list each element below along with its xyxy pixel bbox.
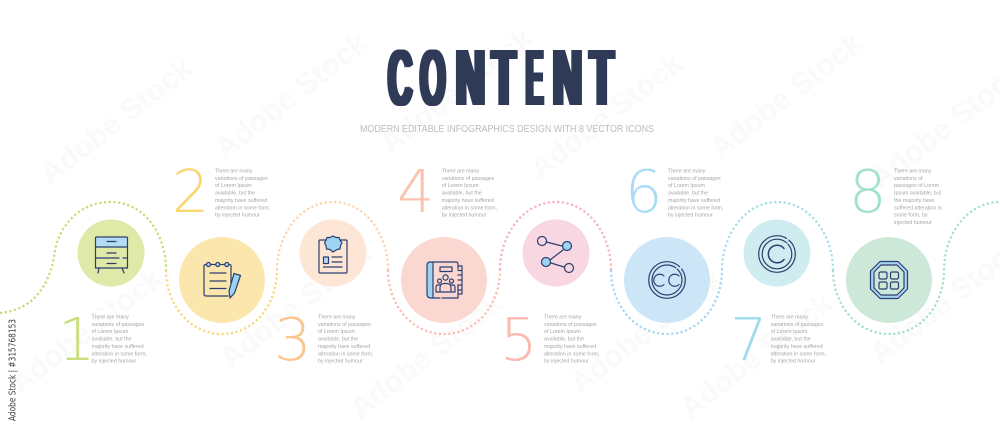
text block 3: There are many xyxy=(318,314,356,320)
numeral 5: 5 xyxy=(500,305,538,374)
text block 1: available, but the xyxy=(92,337,132,343)
subtitle: MODERN EDITABLE INFOGRAPHICS DESIGN WITH 8 VECTOR ICONS xyxy=(360,124,654,135)
text block 6: of Lorem Ipsum xyxy=(668,183,705,189)
text block 1: majority have suffered xyxy=(92,344,144,350)
title: O xyxy=(420,33,446,122)
text block 1: There are many xyxy=(92,314,129,320)
text block 8: Ipsum available, but xyxy=(894,191,942,197)
watermark layer: Adobe Stock xyxy=(524,46,689,186)
text block 5: variations of passages xyxy=(544,322,597,328)
step 2 circle xyxy=(179,237,265,323)
text block 8: injected humour xyxy=(894,220,932,226)
numeral 7: 7 xyxy=(730,305,768,374)
title: T xyxy=(492,33,515,122)
text block 6: majority have suffered xyxy=(668,198,720,204)
watermark layer: Adobe Stock xyxy=(209,26,374,166)
icon: share nodes xyxy=(538,236,574,272)
stock id label: Adobe Stock | #315768153 xyxy=(8,319,18,421)
text block 5: There are many xyxy=(544,314,582,320)
text block 3: by injected humour xyxy=(318,359,363,365)
title xyxy=(387,33,616,122)
text block 8: some form, by xyxy=(894,213,928,219)
icon: certificate document xyxy=(319,236,347,273)
text block 8: There are many xyxy=(894,168,932,174)
title: N xyxy=(553,33,582,122)
step 1 circle xyxy=(78,220,144,286)
watermark layer: Adobe Stock xyxy=(374,21,539,161)
title: N xyxy=(456,33,485,122)
step 4 circle xyxy=(401,237,487,323)
text block 7: available, but the xyxy=(771,337,811,343)
watermark layer: Adobe Stock xyxy=(34,51,199,191)
step 8 circle xyxy=(846,237,932,323)
numeral 6: 6 xyxy=(625,157,663,226)
text block 6: by injected humour xyxy=(668,213,713,219)
watermark layer: Adobe Stock xyxy=(4,261,169,401)
step 5 circle xyxy=(522,220,590,286)
text block 2: There are many xyxy=(215,168,253,174)
text block 1: by injected humour xyxy=(92,359,136,365)
icon: address book xyxy=(427,262,462,298)
title: C xyxy=(388,33,412,122)
icon: notepad and pencil xyxy=(204,262,240,298)
numeral 2: 2 xyxy=(172,157,210,226)
numeral 8: 8 xyxy=(849,157,887,226)
text block 4: variations of passages xyxy=(442,176,495,182)
text block 4: available, but the xyxy=(442,191,482,197)
text block 2: available, but the xyxy=(215,191,255,197)
text block 2: variations of passages xyxy=(215,176,268,182)
text block 3: of Lorem Ipsum xyxy=(318,329,355,335)
text block 3: available, but the xyxy=(318,337,358,343)
text block 2: of Lorem Ipsum xyxy=(215,183,252,189)
text block 5: of Lorem Ipsum xyxy=(544,329,581,335)
text block 4: by injected humour xyxy=(442,213,487,219)
icon: cabinet xyxy=(96,237,128,273)
watermark layer: Adobe Stock xyxy=(344,286,509,426)
text block 7: There are many xyxy=(771,314,808,320)
numeral 3: 3 xyxy=(274,305,312,374)
text block 7: variations of passages xyxy=(771,322,824,328)
watermark layer: Adobe Stock xyxy=(704,26,869,166)
text block 3: variations of passages xyxy=(318,322,371,328)
text block 3: alteration in some form, xyxy=(318,351,373,357)
dotted timeline path xyxy=(0,202,1000,334)
text block 2: majority have suffered xyxy=(215,198,267,204)
icon: copyright xyxy=(759,236,795,272)
text block 4: of Lorem Ipsum xyxy=(442,183,479,189)
text block 6: There are many xyxy=(668,168,706,174)
text block 8: the majority have xyxy=(894,198,934,204)
text block 3: majority have suffered xyxy=(318,344,370,350)
title: E xyxy=(526,33,543,122)
numeral 1: 1 xyxy=(58,305,96,374)
text block 5: by injected humour xyxy=(544,359,589,365)
text block 7: of Lorem Ipsum xyxy=(771,329,808,335)
text block 6: variations of passages xyxy=(668,176,721,182)
text block 8: suffered alteration in xyxy=(894,205,942,211)
text block 8: variations of xyxy=(894,176,923,182)
numeral 4: 4 xyxy=(397,157,435,226)
icon: octagon grid xyxy=(870,262,908,298)
step 6 circle xyxy=(624,237,710,323)
text block 7: majority have suffered xyxy=(771,344,823,350)
text block 4: alteration in some form, xyxy=(442,205,497,211)
text block 7: by injected humour xyxy=(771,359,816,365)
watermark layer: Adobe Stock xyxy=(674,286,839,426)
text block 8: passages of Lorem xyxy=(894,183,940,189)
text block 5: alteration in some form, xyxy=(544,351,599,357)
icon: creative commons xyxy=(649,262,685,298)
watermark layer: Adobe Stock xyxy=(564,261,729,401)
text block 4: majority have suffered xyxy=(442,198,494,204)
text block 2: by injected humour xyxy=(215,213,260,219)
text block 1: alteration in some form, xyxy=(92,351,147,357)
text block 2: alteration in some form, xyxy=(215,205,270,211)
text block 6: alteration in some form, xyxy=(668,205,723,211)
step 3 circle xyxy=(300,220,366,286)
step 7 circle xyxy=(744,220,810,286)
text block 4: There are many xyxy=(442,168,479,174)
text block 5: majority have suffered xyxy=(544,344,596,350)
watermark layer: Adobe Stock xyxy=(214,236,379,376)
title: T xyxy=(590,33,613,122)
text block 5: available, but the xyxy=(544,337,584,343)
text block 7: alteration in some form, xyxy=(771,351,826,357)
text block 6: available, but the xyxy=(668,191,708,197)
text block 1: variations of passages xyxy=(92,322,145,328)
text block 1: of Lorem Ipsum xyxy=(92,329,129,335)
